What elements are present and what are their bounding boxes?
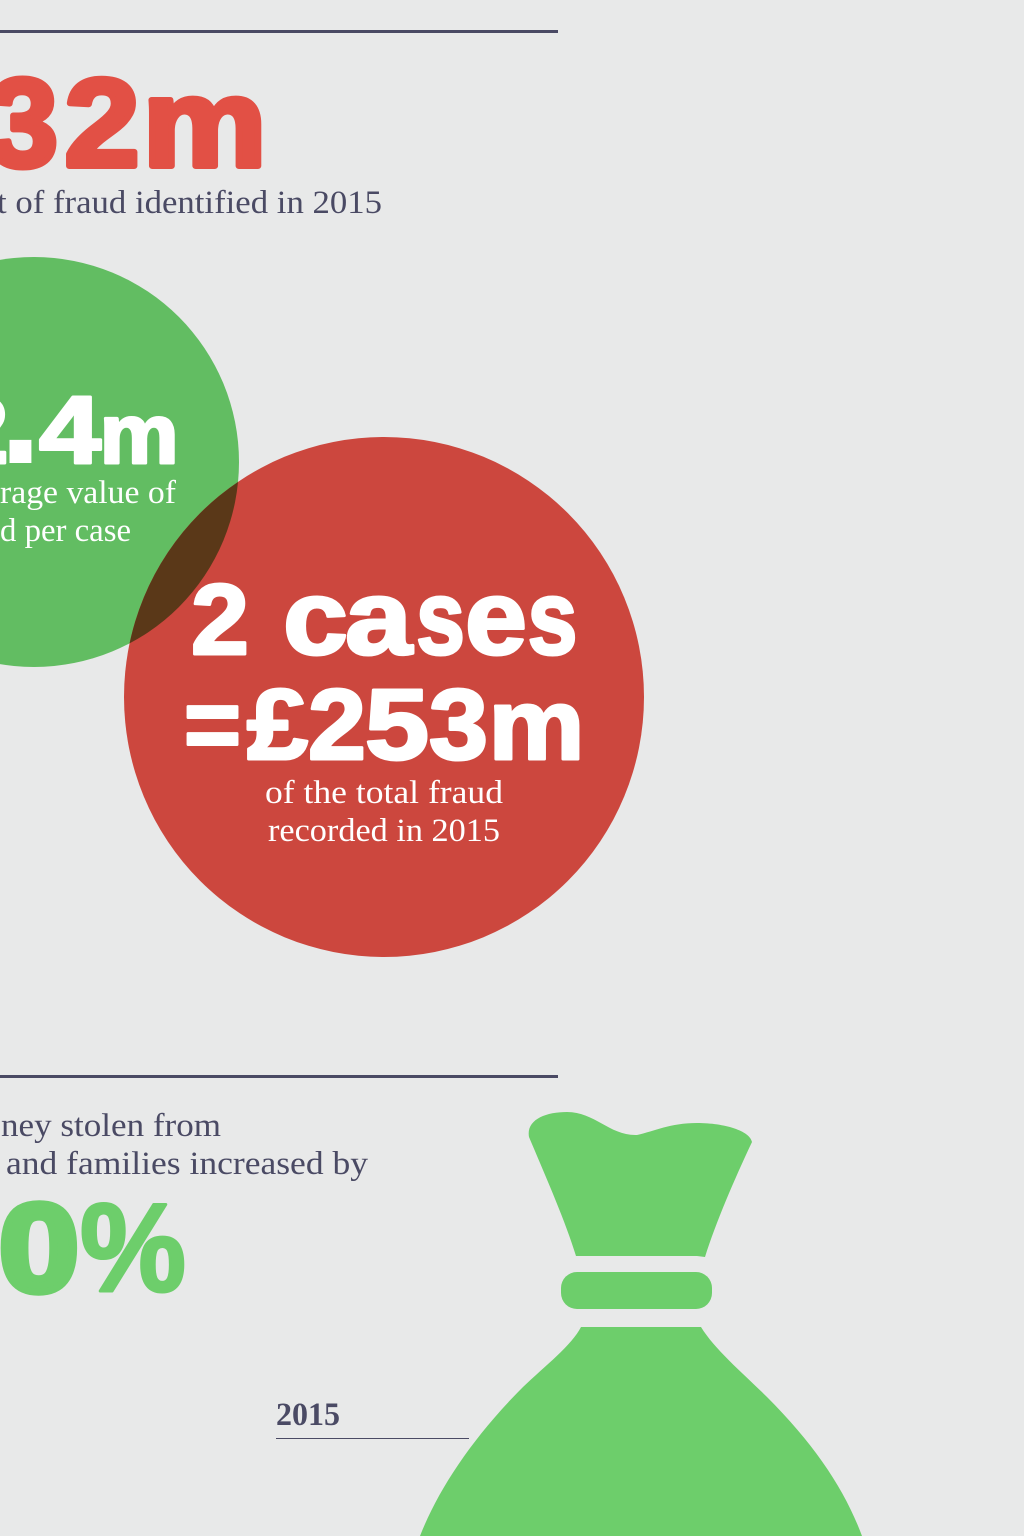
caption: money stolen: and families increased by: [6, 1146, 369, 1182]
circle overlap: [130, 482, 238, 644]
big number: 2.4m: [0, 323, 179, 496]
big number: 32m: 2: [65, 54, 140, 193]
big number: percent: %: [80, 1179, 186, 1318]
caption: average value per case: rage value of: [0, 475, 176, 511]
big number: 32m: m: [143, 54, 267, 193]
year label: 2015: [276, 1397, 340, 1433]
big text: equals 253m: m: [488, 669, 584, 781]
big text: equals 253m: £: [247, 669, 308, 781]
circle: two cases: [124, 437, 644, 957]
big text: 2 cases: s: [528, 559, 578, 677]
caption: money stolen: [1, 1108, 369, 1182]
big text: 2 cases: c: [283, 559, 348, 677]
big text: 2 cases: a: [345, 559, 413, 677]
big number: 2.4m: 4: [39, 377, 101, 484]
big text: equals 253m: 3: [429, 669, 488, 781]
caption: average value per case: [0, 475, 176, 549]
big text: equals 253m: 2: [308, 669, 366, 781]
big text: 2 cases: s: [416, 559, 465, 677]
caption: money stolen: ney stolen from: [1, 1108, 221, 1144]
caption: total fraud recorded: recorded in 2015: [268, 813, 500, 849]
big text: equals 253m: 5: [365, 669, 429, 781]
big number: 2.4m: .: [0, 323, 42, 496]
caption: total fraud recorded: of the total fraud: [265, 775, 504, 811]
big text: 2 cases: [191, 559, 578, 677]
big number: percent: 0: [0, 1179, 79, 1318]
big text: equals 253m: =: [184, 669, 241, 781]
big number: 2.4m: m: [100, 387, 179, 481]
big text: equals 253m: [184, 669, 584, 781]
big text: 2 cases: e: [465, 559, 527, 677]
circle: average value: [0, 257, 239, 667]
caption: total fraud recorded: [265, 775, 504, 849]
big number: 32m: [0, 54, 267, 193]
panel: total fraud amount: [0, 30, 558, 221]
caption: average value per case: d per case: [0, 513, 131, 549]
panel: overlapping circles: [0, 257, 644, 957]
panel: money stolen increase: [0, 1075, 558, 1439]
icon: money bag: [420, 1112, 862, 1536]
big number: percent: [0, 1179, 186, 1318]
caption: fraud identified: t of fraud identified in 2015: [0, 185, 382, 221]
big text: 2 cases: 2: [191, 564, 249, 676]
